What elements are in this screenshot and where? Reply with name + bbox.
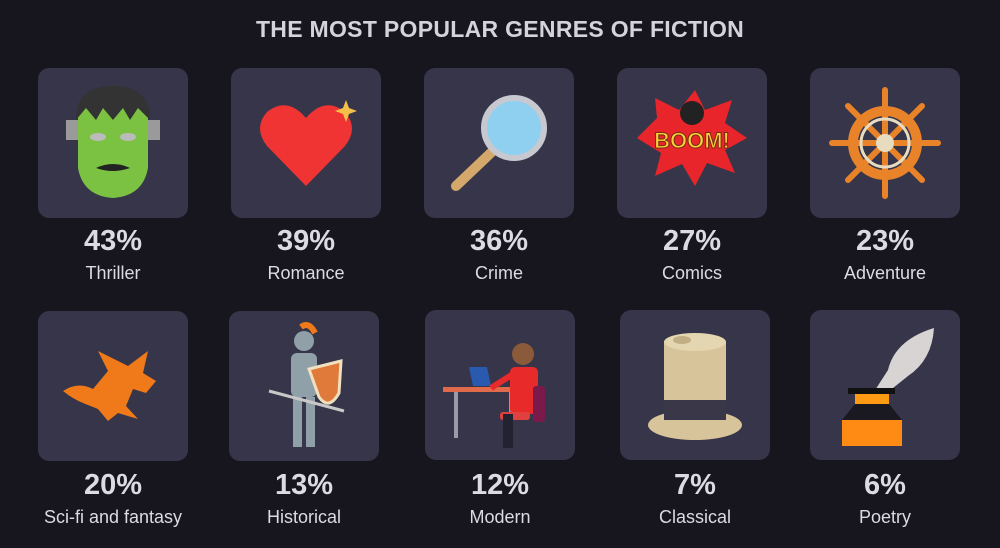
value: adventure: 23% [856,225,914,257]
card: classical [620,310,770,460]
value: classical: 7% [674,469,716,501]
value: comics: 27% [663,225,721,257]
value: crime: 36% [470,225,528,257]
value: romance: 39% [277,225,335,257]
label: comics: Comics [662,263,722,283]
card: thriller [38,68,188,218]
label: adventure: Adventure [844,263,926,283]
label: historical: Historical [267,507,341,527]
card: adventure [810,68,960,218]
card: historical [229,311,379,461]
value: modern: 12% [471,469,529,501]
value: poetry: 6% [864,469,906,501]
value: sci-fi: 20% [84,469,142,501]
card: romance [231,68,381,218]
card: modern [425,310,575,460]
card: sci-fi [38,311,188,461]
label: sci-fi: Sci-fi and fantasy [44,507,182,527]
card: crime [424,68,574,218]
label: romance: Romance [267,263,345,283]
title: THE MOST POPULAR GENRES OF FICTION [256,16,744,42]
label: poetry: Poetry [859,507,911,527]
label: modern: Modern [469,507,531,527]
value: historical: 13% [275,469,333,501]
value: thriller: 43% [84,225,142,257]
label: thriller: Thriller [85,263,140,283]
card: comics: BOOM! [654,128,730,153]
card: poetry [810,310,960,460]
label: classical: Classical [659,507,731,527]
label: crime: Crime [475,263,523,283]
card: comics [617,68,767,218]
